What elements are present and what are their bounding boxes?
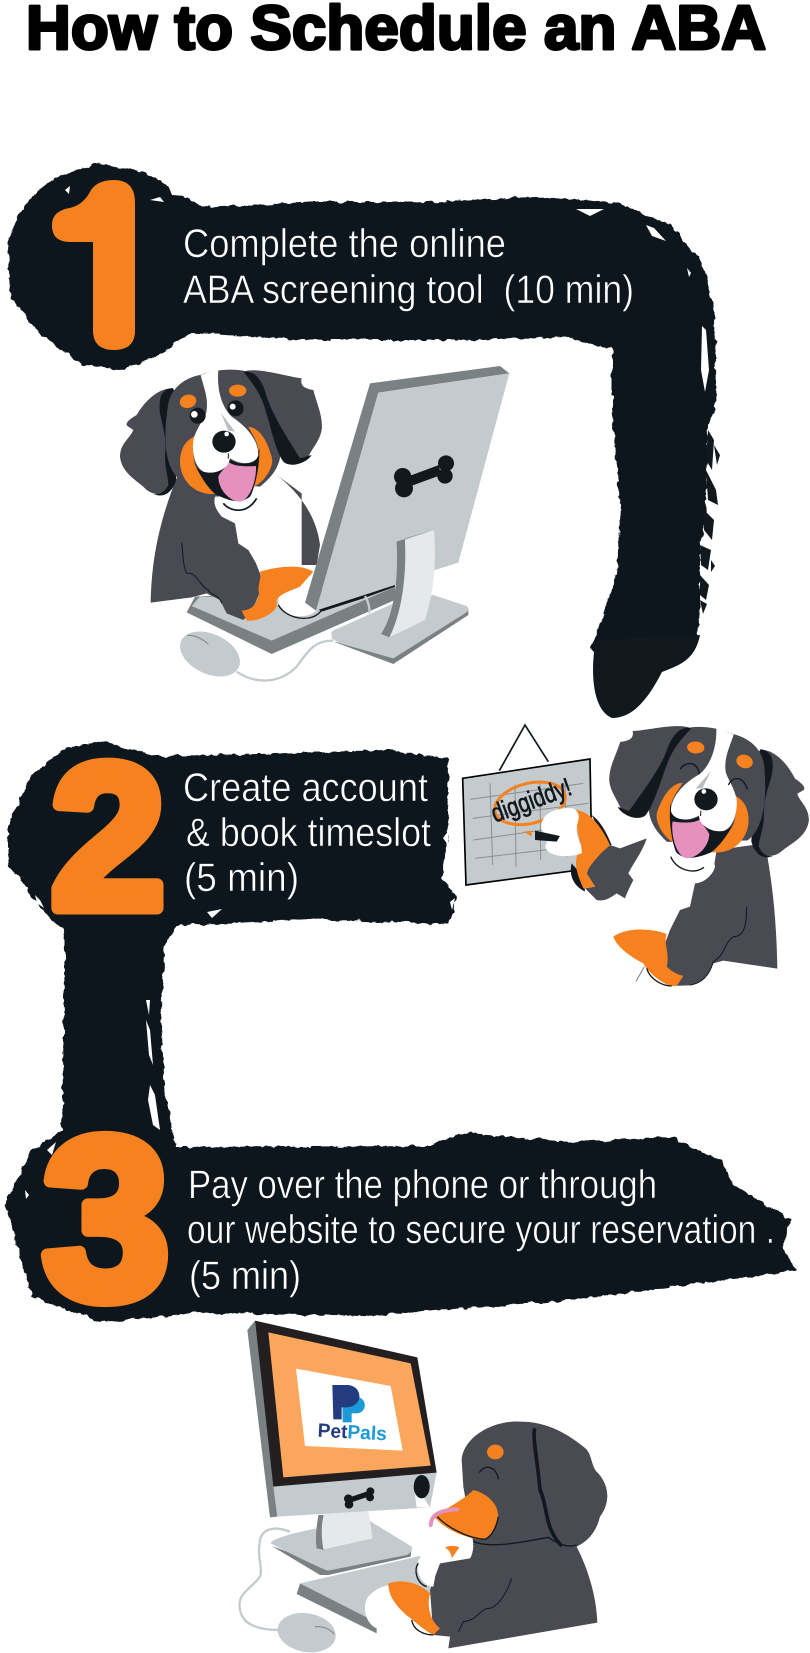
heading: step 3 numeral: 3 [42, 1090, 170, 1347]
monitor [305, 366, 509, 637]
heading: step 1 numeral: 1 [35, 139, 165, 398]
text block: step 3 [187, 1163, 775, 1298]
text block: step 2: (5 min) [184, 856, 299, 900]
dog body [613, 843, 777, 986]
monitor base [331, 595, 468, 664]
keyboard [297, 1556, 440, 1633]
dog head [120, 370, 322, 510]
text block: step 3: Pay over the phone or through [188, 1163, 657, 1207]
dog head [604, 721, 810, 883]
illustration: dog at computer [120, 366, 509, 686]
calendar [463, 725, 592, 885]
calendar note: diggiddy! [487, 772, 575, 828]
panel: step 2 and 3 brush stroke [5, 741, 796, 1322]
text block: step 2: Create account [183, 766, 428, 810]
mouse [173, 622, 333, 686]
dog arm and hand [524, 808, 647, 900]
cable and mouse [239, 1529, 339, 1653]
text block: step 2: & book timeslot [186, 811, 431, 855]
text block: step 3: (5 min) [189, 1254, 301, 1298]
logo: PetPals [317, 1385, 387, 1445]
text block: step 1 [183, 222, 634, 312]
panel: step 1 brush stroke [8, 163, 720, 718]
dog body [151, 460, 322, 621]
text block: step 1: Complete the online [183, 222, 506, 266]
heading: step 2 numeral: 2 [51, 722, 165, 952]
keyboard [187, 585, 395, 654]
text block: step 2 [183, 766, 431, 900]
text block: step 1: ABA screening tool (10 min) [183, 268, 634, 312]
illustration: dog paying online [239, 1321, 607, 1653]
icon: bone [344, 1487, 374, 1509]
monitor stand [271, 1511, 412, 1575]
logo: PetPals: PetPals [317, 1421, 387, 1445]
monitor [247, 1321, 437, 1517]
icon: bone [394, 455, 454, 497]
dog [365, 1422, 607, 1648]
illustration: dog marking calendar [463, 721, 810, 986]
